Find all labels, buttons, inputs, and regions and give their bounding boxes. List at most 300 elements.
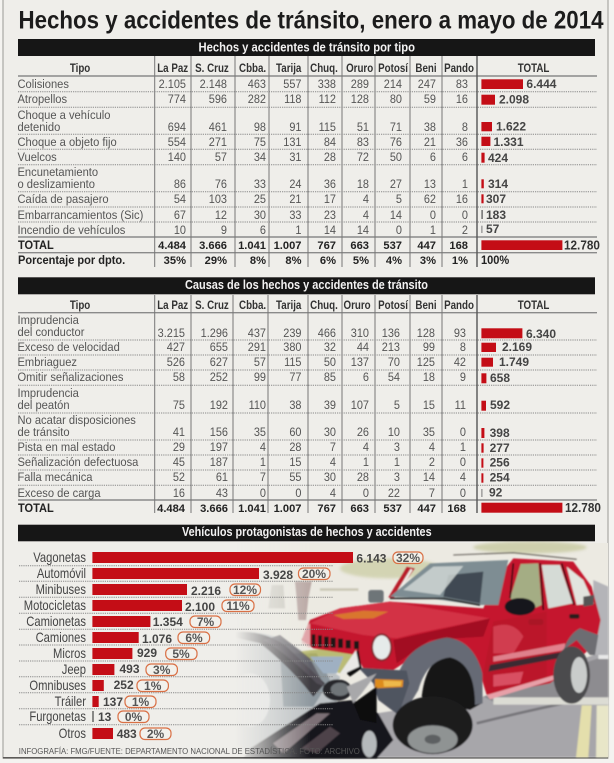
row: Choque a vehículo detenido: 115 <box>319 122 336 134</box>
row: Caída de pasajero: 62 <box>424 194 436 206</box>
row: Imprudencia del peatón: Imprudencia <box>18 388 79 400</box>
row: Imprudencia del conductor: 310 <box>351 328 369 340</box>
row: Embarrancamientos: 4 <box>363 210 369 222</box>
row: Choque a vehículo detenido: 98 <box>254 122 266 134</box>
row: No acatar disposiciones de tránsito <box>18 415 510 440</box>
bar: Omnibuses: Omnibuses <box>29 678 86 693</box>
row: Choque a vehículo detenido: 51 <box>357 122 369 134</box>
row: Omitir señalizaciones: 9 <box>460 372 466 384</box>
row: Embarrancamientos: Embarrancamientos (Sic) <box>18 210 143 222</box>
row: Señalización defectuosa: 4 <box>330 457 336 469</box>
row: Exceso de velocidad: Exceso de velocidad <box>18 342 120 354</box>
row: TOTAL: 4.484 <box>158 240 187 252</box>
row: Pista en mal estado: 29 <box>173 442 185 454</box>
row: Pista en mal estado: 197 <box>210 442 228 454</box>
column header row 1: TOTAL <box>518 62 550 75</box>
black car windshield and interior <box>248 634 341 748</box>
row: Exceso de carga: 0 <box>260 488 266 500</box>
row: Exceso de carga: 22 <box>388 488 400 500</box>
bar: Furgonetas: 0% <box>125 710 143 724</box>
row: Omitir señalizaciones: 18 <box>423 372 435 384</box>
row: No acatar disposiciones de tránsito: 35 <box>423 427 435 439</box>
row: Caída de pasajero: 17 <box>324 194 336 206</box>
row: Imprudencia del peatón <box>18 388 510 412</box>
column header row 2: Beni <box>415 299 437 312</box>
row: Atropellos: 80 <box>390 94 402 106</box>
row: Omitir señalizaciones: 77 <box>289 372 302 384</box>
row: Porcentaje por dpto.: 3% <box>420 255 436 267</box>
black car hood and mirror <box>230 632 325 697</box>
row: Vuelcos: 28 <box>324 152 336 164</box>
fender flare <box>399 636 484 708</box>
row: Embarrancamientos: 0 <box>462 210 468 222</box>
bar: Jeep: 493 <box>120 662 140 676</box>
row: TOTAL: 1.007 <box>274 240 301 252</box>
row: Caída de pasajero: 54 <box>174 194 186 206</box>
row: Imprudencia del peatón: 75 <box>173 400 185 412</box>
front tire <box>393 696 473 754</box>
row: Colisiones: 338 <box>318 79 336 91</box>
row: Omitir señalizaciones: 6 <box>363 372 369 384</box>
heading: table 1: Hechos y accidentes de tránsito por tipo <box>198 40 415 54</box>
row: Porcentaje por dpto.: 8% <box>250 255 266 267</box>
row: TOTAL: 12.780 <box>564 238 600 253</box>
bar: Vagonetas: Vagonetas <box>33 550 86 565</box>
row: Porcentaje por dpto.: Porcentaje por dpto. <box>18 255 125 267</box>
row: Exceso de velocidad: 380 <box>283 342 302 354</box>
footer credit: INFOGRAFÍA: FMG/FUENTE: DEPARTAMENTO NACIONAL DE ESTADÍSTICA. FOTO: ARCHIVO <box>19 746 360 756</box>
row: Exceso de velocidad <box>18 340 532 354</box>
column header row 1: Beni <box>415 62 437 75</box>
column header row 1 <box>70 62 550 75</box>
row: Vuelcos: 72 <box>357 152 369 164</box>
row: No acatar disposiciones de tránsito: 398 <box>490 426 510 440</box>
row: Señalización defectuosa: 0 <box>460 457 466 469</box>
row: Atropellos: 2.098 <box>499 92 529 106</box>
row: Omitir señalizaciones: 252 <box>210 372 228 384</box>
row: Caída de pasajero <box>18 192 506 206</box>
row: Falla mecánica: 7 <box>260 472 266 484</box>
column header row 1: Pando <box>444 62 474 75</box>
row: Pista en mal estado: 28 <box>289 442 302 454</box>
row: Choque a vehículo detenido: 91 <box>289 122 302 134</box>
row: Caída de pasajero: 307 <box>486 192 506 206</box>
row: Señalización defectuosa: 45 <box>173 457 185 469</box>
row: Colisiones: 557 <box>283 79 302 91</box>
row: Exceso de velocidad: 2.169 <box>502 340 532 354</box>
row: No acatar disposiciones de tránsito: 30 <box>324 427 336 439</box>
row: Choque a objeto fijo: Choque a objeto fijo <box>18 137 117 149</box>
row: Embarrancamientos: 12 <box>215 210 227 222</box>
row: Exceso de carga: 16 <box>173 488 185 500</box>
row: Choque a objeto fijo: 21 <box>424 137 436 149</box>
row: Imprudencia del conductor: Imprudencia <box>18 315 79 327</box>
bar: Vagonetas: 32% <box>396 551 420 565</box>
row: Imprudencia del conductor: 93 <box>454 328 466 340</box>
row: Incendio de vehículos: 14 <box>324 225 336 237</box>
bar: Furgonetas: 13 <box>98 710 112 724</box>
row: TOTAL causes: 1.041 <box>238 503 266 515</box>
row: TOTAL: 3.666 <box>199 240 227 252</box>
row: Imprudencia del conductor <box>18 315 556 341</box>
row: Señalización defectuosa: 1 <box>363 457 369 469</box>
row: Embriaguez: 70 <box>388 357 400 369</box>
row: Imprudencia del peatón: 15 <box>423 400 435 412</box>
row: Choque a vehículo detenido: 694 <box>168 122 186 134</box>
row: Encunetamiento o deslizamiento: 18 <box>357 179 369 191</box>
row: Pista en mal estado: 7 <box>330 442 336 454</box>
row: Imprudencia del peatón: 5 <box>394 400 400 412</box>
row: Colisiones: 247 <box>418 79 436 91</box>
row: Atropellos: 128 <box>351 94 369 106</box>
row: Incendio de vehículos: 14 <box>357 225 369 237</box>
bar: Camionetas <box>26 614 221 629</box>
row: Caída de pasajero: Caída de pasajero <box>18 194 109 206</box>
column header row 1: S. Cruz <box>195 62 229 75</box>
row: Atropellos: 596 <box>209 94 227 106</box>
bar: Automóvil: 3.928 <box>263 568 293 582</box>
row: Imprudencia del peatón: 592 <box>490 398 510 412</box>
row: TOTAL: TOTAL <box>18 240 54 252</box>
row: Choque a vehículo detenido: detenido <box>18 122 60 134</box>
row: Choque a objeto fijo: 84 <box>324 137 336 149</box>
row: Exceso de carga: 43 <box>216 488 228 500</box>
bar: Jeep <box>62 662 177 677</box>
row: Falla mecánica: 254 <box>490 470 510 484</box>
row: Porcentaje por dpto.: 1% <box>452 255 468 267</box>
row: Falla mecánica: 55 <box>289 472 302 484</box>
row: Exceso de velocidad: 99 <box>423 342 435 354</box>
row: No acatar disposiciones de tránsito: 60 <box>289 427 302 439</box>
row: Porcentaje por dpto.: 35% <box>164 255 186 267</box>
row: Choque a objeto fijo <box>18 135 524 149</box>
row: Señalización defectuosa: 187 <box>210 457 228 469</box>
front bumper <box>358 668 409 715</box>
column header row 1: La Paz <box>157 62 188 75</box>
row: Choque a vehículo detenido <box>18 110 526 134</box>
road <box>377 655 608 757</box>
row: Embarrancamientos: 67 <box>174 210 186 222</box>
row: Exceso de carga: 0 <box>363 488 369 500</box>
row: TOTAL causes <box>18 501 601 515</box>
bar: Otros: 2% <box>147 727 165 741</box>
column header row 2: Tarija <box>276 299 301 312</box>
row: Atropellos: Atropellos <box>18 94 67 106</box>
bar: Automóvil <box>37 566 330 582</box>
row: Incendio de vehículos: Incendio de vehículos <box>18 225 126 237</box>
row: Imprudencia del conductor: del conductor <box>18 327 85 339</box>
row: TOTAL causes: 12.780 <box>565 501 601 515</box>
bar: Minibuses: 2.216 <box>191 584 221 598</box>
wheel well <box>422 655 482 710</box>
door detail <box>483 612 547 693</box>
row: Choque a objeto fijo: 131 <box>283 137 302 149</box>
column header row 2: Oruro <box>343 299 371 312</box>
row: Incendio de vehículos: 57 <box>486 222 500 236</box>
row: Exceso de velocidad: 655 <box>210 342 228 354</box>
row: Caída de pasajero: 16 <box>456 194 468 206</box>
row: Incendio de vehículos: 0 <box>396 225 402 237</box>
row: Señalización defectuosa: 1 <box>394 457 400 469</box>
row: Embarrancamientos: 183 <box>486 208 506 222</box>
row: Imprudencia del conductor: 6.340 <box>526 327 556 341</box>
panel: causes table <box>18 277 601 515</box>
side windows <box>510 563 542 610</box>
row: Porcentaje por dpto.: 8% <box>285 255 302 267</box>
row: Exceso de velocidad: 44 <box>357 342 369 354</box>
mirrors <box>505 598 535 615</box>
bar: Micros: 5% <box>172 647 190 661</box>
bar: Jeep: Jeep <box>62 662 86 677</box>
row: Vuelcos: 57 <box>215 152 227 164</box>
bar: Otros: Otros <box>59 726 86 741</box>
row: Choque a objeto fijo: 75 <box>254 137 266 149</box>
row: Exceso de velocidad: 32 <box>324 342 336 354</box>
row: Imprudencia del conductor: 239 <box>283 328 302 340</box>
bar: Vagonetas <box>33 550 423 566</box>
row: Exceso de carga <box>18 486 503 500</box>
row: Porcentaje por dpto. <box>18 255 509 267</box>
row: Choque a objeto fijo: 76 <box>390 137 402 149</box>
row: TOTAL causes: 4.484 <box>157 503 186 515</box>
row: Omitir señalizaciones: Omitir señalizaciones <box>18 372 124 384</box>
row: Imprudencia del peatón: del peatón <box>18 400 70 412</box>
row: Señalización defectuosa: 15 <box>289 457 302 469</box>
row: Embarrancamientos: 23 <box>324 210 336 222</box>
row: Encunetamiento o deslizamiento <box>18 167 508 191</box>
bar: Omnibuses: 1% <box>144 679 162 693</box>
row: Encunetamiento o deslizamiento: 86 <box>174 179 186 191</box>
row: Colisiones: 83 <box>456 79 468 91</box>
row: Atropellos: 112 <box>319 94 336 106</box>
row: Choque a vehículo detenido: 8 <box>462 122 468 134</box>
row: Embriaguez: 125 <box>417 357 435 369</box>
row: Embarrancamientos: 33 <box>289 210 302 222</box>
row: Embriaguez: 1.749 <box>499 355 529 369</box>
column header row 1: Chuq. <box>310 62 338 75</box>
column header row 1: Potosí <box>378 62 409 75</box>
row: Encunetamiento o deslizamiento: 13 <box>424 179 436 191</box>
row: Omitir señalizaciones: 99 <box>254 372 266 384</box>
row: Omitir señalizaciones <box>18 371 510 385</box>
row: Exceso de carga: 0 <box>460 488 466 500</box>
row: Incendio de vehículos: 10 <box>174 225 186 237</box>
row: Pista en mal estado <box>18 441 510 455</box>
row: Incendio de vehículos: 2 <box>462 225 468 237</box>
row: Atropellos <box>18 92 529 106</box>
row: Falla mecánica: 14 <box>423 472 435 484</box>
row: Imprudencia del conductor: 128 <box>417 328 435 340</box>
heading: table 2: Causas de los hechos y accidentes de tránsito <box>185 277 428 292</box>
row: Embriaguez: 137 <box>351 357 369 369</box>
row: Imprudencia del peatón: 110 <box>249 400 266 412</box>
row: Porcentaje por dpto.: 29% <box>205 255 227 267</box>
row: No acatar disposiciones de tránsito: 156 <box>210 427 228 439</box>
row: Falla mecánica <box>18 470 510 484</box>
row: Pista en mal estado: 277 <box>490 441 510 455</box>
row: Incendio de vehículos: 6 <box>260 225 266 237</box>
row: No acatar disposiciones de tránsito: 26 <box>357 427 369 439</box>
row: Falla mecánica: 52 <box>173 472 185 484</box>
row: Imprudencia del peatón: 11 <box>455 400 466 412</box>
row: Choque a objeto fijo: 1.331 <box>494 135 524 149</box>
scenery behind the jeep <box>340 558 440 578</box>
row: No acatar disposiciones de tránsito: de tránsito <box>18 427 70 439</box>
grille <box>312 634 359 649</box>
bar: Tráiler: Tráiler <box>55 694 86 709</box>
row: Embarrancamientos: 14 <box>390 210 402 222</box>
row: Encunetamiento o deslizamiento: 24 <box>289 179 302 191</box>
row: Falla mecánica: 30 <box>324 472 336 484</box>
row: Vuelcos: 6 <box>462 152 468 164</box>
row: Exceso de carga: 4 <box>330 488 336 500</box>
row: Choque a objeto fijo: 83 <box>357 137 369 149</box>
row: Embarrancamientos <box>18 208 506 222</box>
column header row 1: Cbba. <box>239 62 266 75</box>
heading: chart: Vehículos protagonistas de hechos y accidentes <box>182 524 432 539</box>
row: Exceso de carga: Exceso de carga <box>18 488 101 500</box>
row: Omitir señalizaciones: 54 <box>388 372 400 384</box>
row: Embarrancamientos: 30 <box>254 210 266 222</box>
row: Imprudencia del conductor: 3.215 <box>158 328 185 340</box>
row: Colisiones: 289 <box>351 79 369 91</box>
row: Falla mecánica: 28 <box>357 472 369 484</box>
row: Imprudencia del peatón: 107 <box>351 400 369 412</box>
bar: Vagonetas: 6.143 <box>356 552 387 566</box>
row: TOTAL: 663 <box>350 240 369 252</box>
bar: Minibuses: Minibuses <box>36 582 86 597</box>
headlight <box>371 633 392 661</box>
row: Vuelcos: 50 <box>390 152 402 164</box>
row: Atropellos: 16 <box>456 94 468 106</box>
row: TOTAL <box>18 238 600 253</box>
row: Exceso de velocidad: 213 <box>382 342 400 354</box>
row: Caída de pasajero: 103 <box>209 194 227 206</box>
bar: Omnibuses <box>29 678 168 693</box>
row: Caída de pasajero: 25 <box>254 194 266 206</box>
row: Vuelcos <box>18 151 508 165</box>
row: Caída de pasajero: 5 <box>396 194 402 206</box>
row: Encunetamiento o deslizamiento: 33 <box>254 179 266 191</box>
row: Colisiones <box>18 77 557 91</box>
row: Caída de pasajero: 21 <box>289 194 302 206</box>
row: Pista en mal estado: 3 <box>394 442 400 454</box>
column header row 2: Tipo <box>70 299 91 312</box>
bar: Micros: Micros <box>53 646 86 661</box>
panel: vehicles bar chart <box>18 524 595 741</box>
windshield <box>390 560 508 605</box>
column header row 2: Potosí <box>378 299 409 312</box>
row: Vuelcos: 34 <box>254 152 266 164</box>
row: Porcentaje por dpto.: 4% <box>386 255 402 267</box>
row: TOTAL causes: 663 <box>350 503 369 515</box>
row: Encunetamiento o deslizamiento: 314 <box>488 177 508 191</box>
column header row 1: Oruro <box>346 62 374 75</box>
column header row 2 <box>70 299 550 312</box>
panel: accidents by type table <box>18 39 600 267</box>
row: No acatar disposiciones de tránsito: 41 <box>173 427 185 439</box>
row: Embriaguez <box>18 355 529 369</box>
bar: Omnibuses: 252 <box>114 678 134 692</box>
row: TOTAL causes: 168 <box>447 503 466 515</box>
row: Imprudencia del conductor: 136 <box>382 328 400 340</box>
row: Imprudencia del peatón: 38 <box>289 400 302 412</box>
row: Pista en mal estado: 1 <box>460 442 466 454</box>
bar: Jeep: 3% <box>153 663 171 677</box>
row: Vuelcos: Vuelcos <box>18 152 57 164</box>
row: Embriaguez: 57 <box>254 357 266 369</box>
row: No acatar disposiciones de tránsito: 0 <box>460 427 466 439</box>
bar: Otros: 483 <box>117 727 137 741</box>
row: Encunetamiento o deslizamiento: Encunetamiento <box>18 167 98 179</box>
bar: Minibuses <box>36 582 261 598</box>
row: TOTAL: 168 <box>449 240 468 252</box>
row: Embriaguez: 115 <box>284 357 302 369</box>
row: Omitir señalizaciones: 58 <box>173 372 185 384</box>
row: Pista en mal estado: 4 <box>429 442 435 454</box>
row: Vuelcos: 140 <box>168 152 186 164</box>
bar: Otros <box>59 726 171 741</box>
row: Atropellos: 774 <box>168 94 186 106</box>
photo: crashed red jeep <box>230 541 608 758</box>
row: Encunetamiento o deslizamiento: 1 <box>462 179 468 191</box>
bar: Automóvil: 20% <box>302 567 326 581</box>
row: Pista en mal estado: 4 <box>363 442 369 454</box>
row: Omitir señalizaciones: 658 <box>490 371 510 385</box>
row: Imprudencia del conductor: 437 <box>248 328 266 340</box>
row: Caída de pasajero: 4 <box>363 194 369 206</box>
row: Encunetamiento o deslizamiento: o deslizamiento <box>18 179 95 191</box>
bar: Motocicletas <box>24 598 254 614</box>
row: Porcentaje por dpto.: 6% <box>320 255 336 267</box>
bar: Motocicletas: 11% <box>226 599 250 613</box>
row: Falla mecánica: Falla mecánica <box>18 472 93 484</box>
row: Falla mecánica: 61 <box>216 472 228 484</box>
row: Embriaguez: 526 <box>167 357 185 369</box>
bar: Tráiler <box>55 694 156 709</box>
row: Embriaguez: 627 <box>210 357 228 369</box>
row: Exceso de carga: 7 <box>429 488 435 500</box>
jeep body <box>302 558 601 695</box>
people in background <box>295 582 312 620</box>
row: No acatar disposiciones de tránsito: 10 <box>388 427 400 439</box>
row: Choque a vehículo detenido: Choque a vehículo <box>18 110 110 122</box>
row: Señalización defectuosa: 2 <box>429 457 435 469</box>
row: Choque a vehículo detenido: 1.622 <box>496 120 526 134</box>
bar: Camiones: Camiones <box>36 630 86 645</box>
row: No acatar disposiciones de tránsito: No acatar disposiciones <box>18 415 136 427</box>
row: TOTAL causes: 537 <box>383 503 402 515</box>
row: TOTAL: 767 <box>317 240 336 252</box>
bar: Motocicletas: 2.100 <box>185 600 215 614</box>
column header row 1: Tarija <box>276 62 301 75</box>
row: Encunetamiento o deslizamiento: 76 <box>215 179 227 191</box>
column header row 2: TOTAL <box>518 299 550 312</box>
row: Falla mecánica: 3 <box>394 472 400 484</box>
row: Choque a vehículo detenido: 38 <box>424 122 436 134</box>
bar: Micros <box>53 646 197 661</box>
row: TOTAL: 1.041 <box>238 240 266 252</box>
row: Omitir señalizaciones: 85 <box>324 372 336 384</box>
row: Exceso de velocidad: 291 <box>248 342 266 354</box>
row: Exceso de carga: 92 <box>489 486 503 500</box>
row: Pista en mal estado: Pista en mal estado <box>18 442 115 454</box>
roof rack <box>453 553 577 559</box>
row: Atropellos: 282 <box>248 94 266 106</box>
row: Vuelcos: 424 <box>488 151 508 165</box>
row: Atropellos: 59 <box>424 94 436 106</box>
row: TOTAL: 537 <box>383 240 402 252</box>
